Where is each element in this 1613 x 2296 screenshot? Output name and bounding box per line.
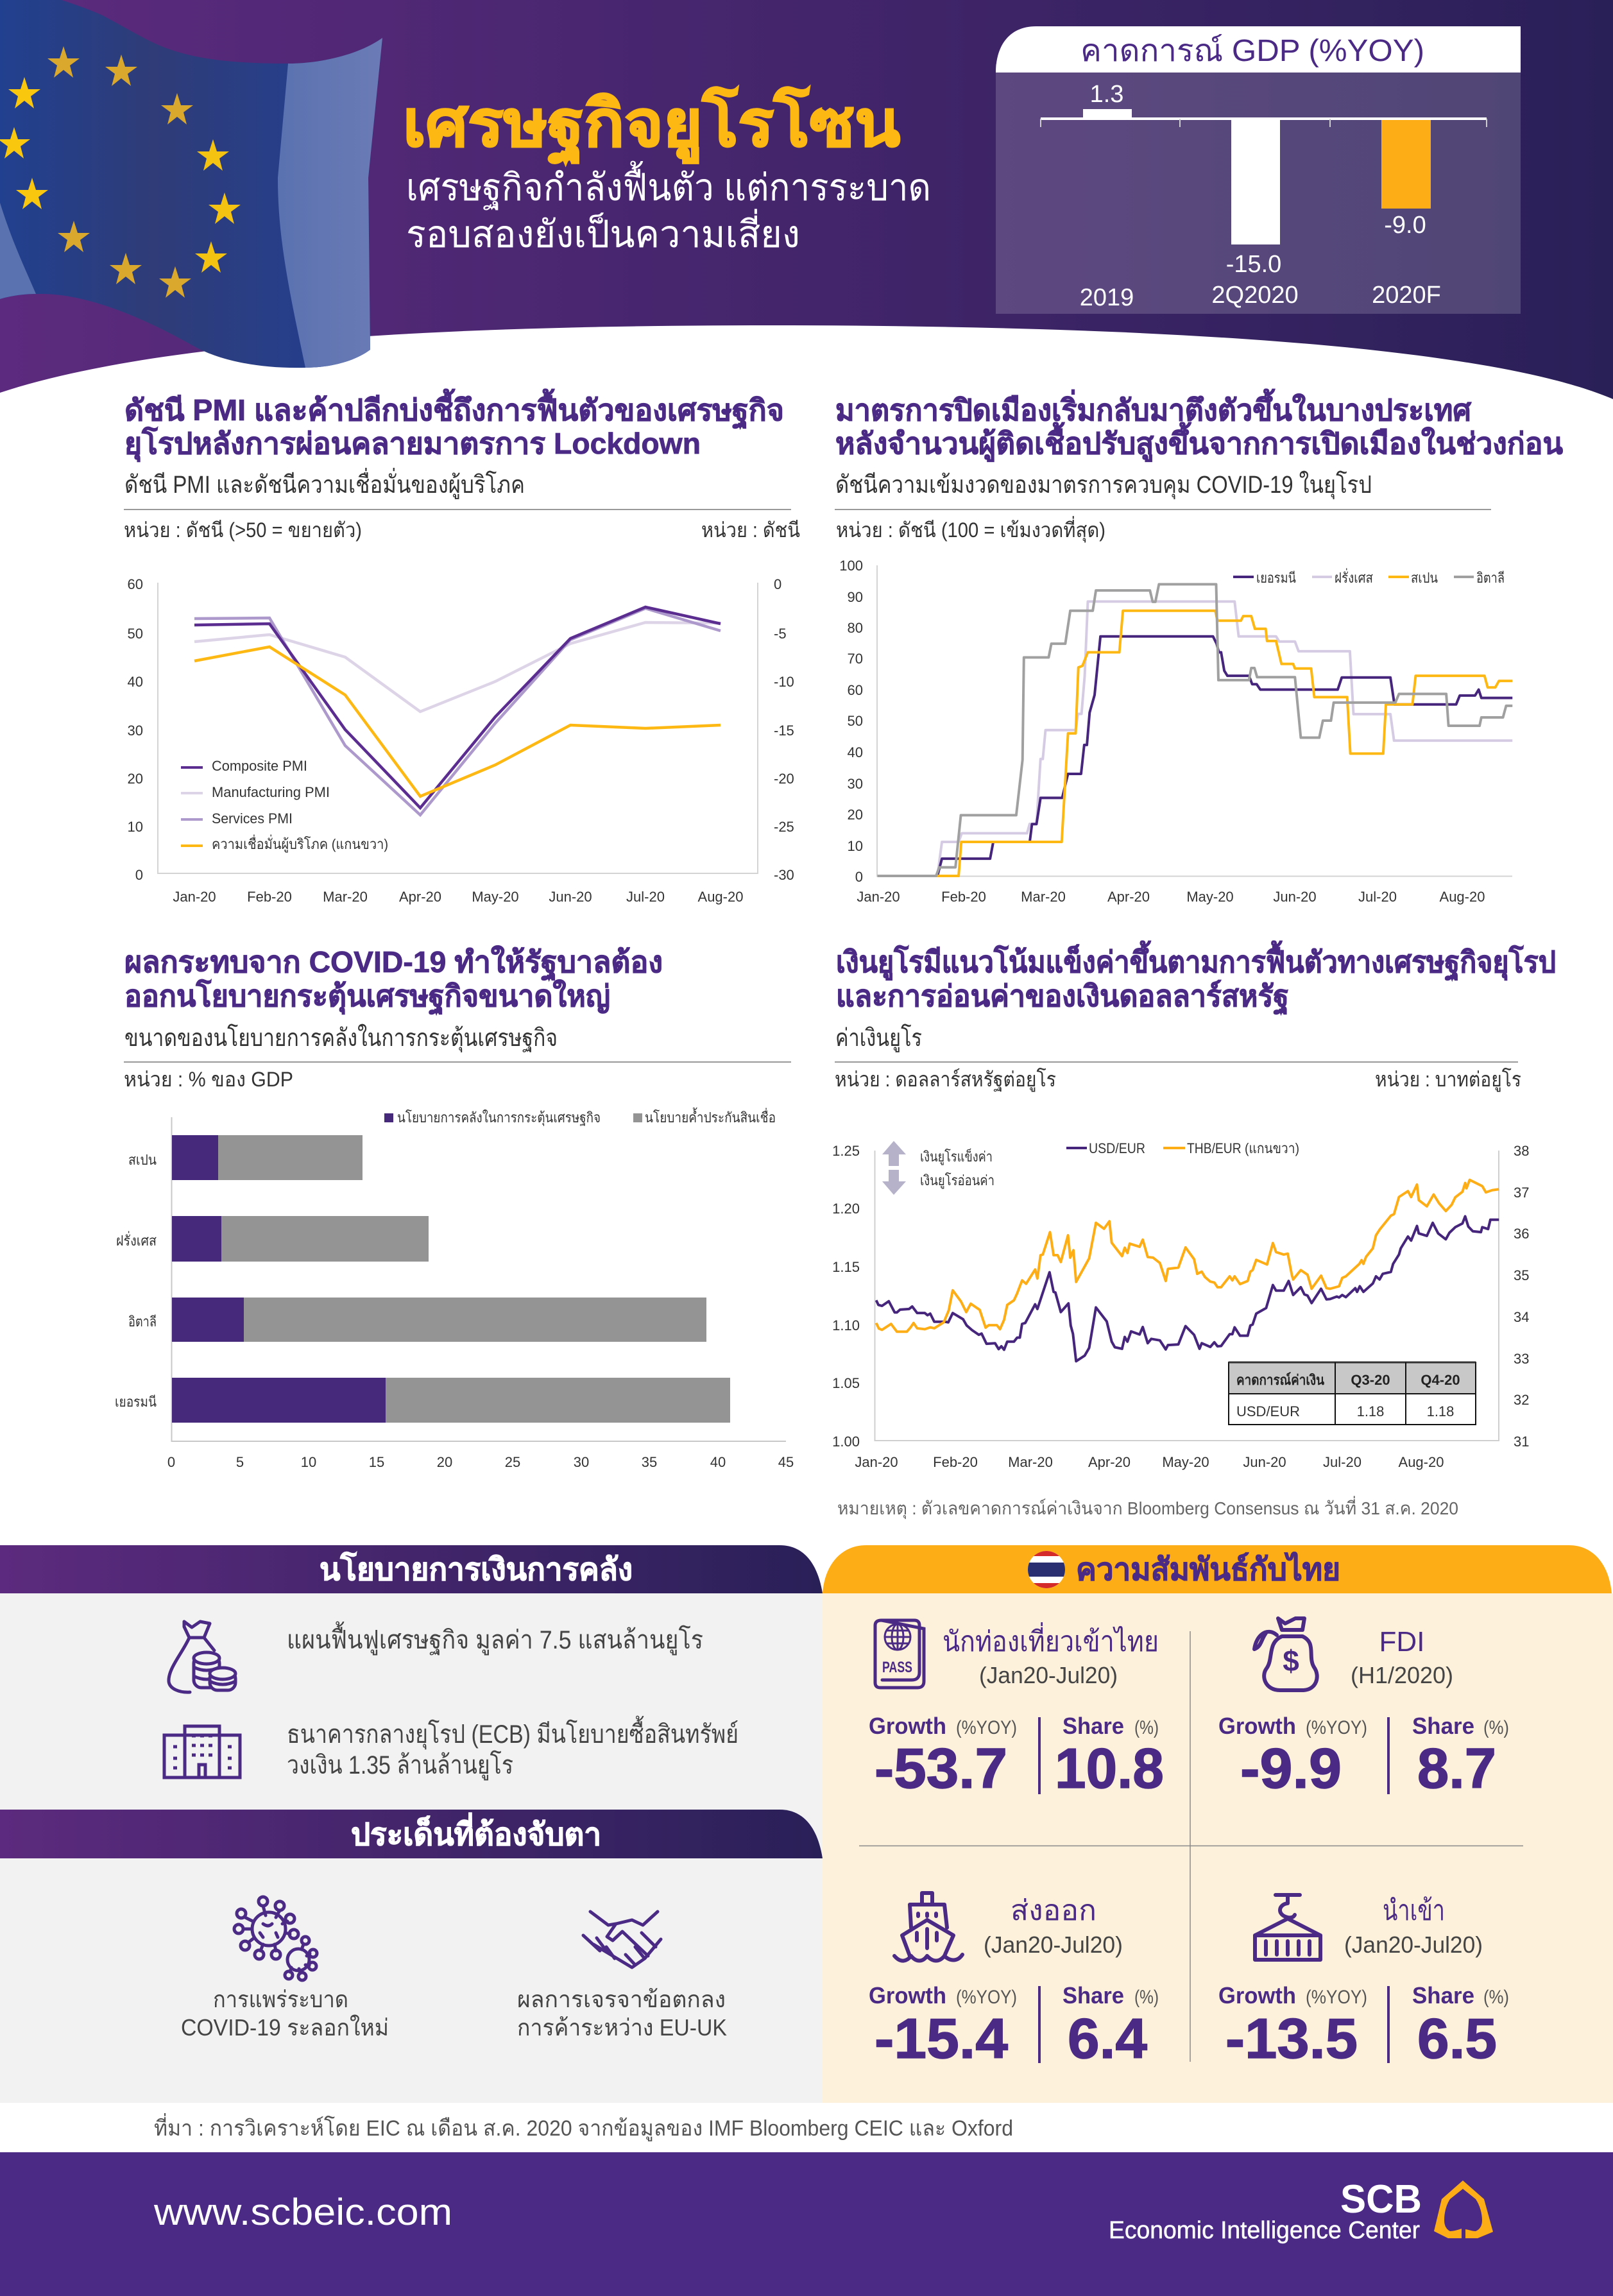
line chart: PMI [128, 576, 794, 905]
imports metric [1218, 1895, 1509, 2070]
tourism metric [869, 1620, 1164, 1800]
line chart: PMI: 60 [128, 576, 143, 592]
line chart: exchange rate: 31 [1514, 1434, 1529, 1450]
exports metric: (Jan20-Jul20) [984, 1932, 1123, 1958]
tourism metric: นักท่องเที่ยวเข้าไทย [943, 1622, 1159, 1658]
exports metric: Share [1063, 1982, 1124, 2009]
heading: PMI: ดัชนี PMI และค้าปลีกบ่งชี้ถึงการฟื้นตัวของเศรษฐกิจ [124, 388, 784, 429]
line chart: PMI: May-20 [472, 889, 519, 905]
text: trade talks: ผลการเจรจาข้อตกลง [517, 1986, 726, 2012]
line chart: stringency index: Mar-20 [1021, 889, 1066, 905]
bar chart: stimulus size: 25 [505, 1454, 520, 1470]
line chart: exchange rate: Feb-20 [933, 1454, 978, 1470]
line chart: stringency index: Aug-20 [1440, 889, 1485, 905]
text: second wave: การแพร่ระบาด [213, 1986, 348, 2012]
line chart: PMI: -10 [774, 674, 794, 690]
header background [0, 0, 1613, 424]
bar chart: stimulus size: 35 [642, 1454, 657, 1470]
line chart: stringency index: 50 [848, 713, 863, 729]
bar chart: stimulus size: 15 [369, 1454, 384, 1470]
heading: stringency: หลังจำนวนผู้ติดเชื้อปรับสูงขึ้นจากการเปิดเมืองในช่วงก่อน [835, 422, 1564, 462]
GDP bar chart: 2020F [1372, 282, 1441, 309]
line chart: PMI: 10 [128, 819, 143, 835]
exports metric: (%YOY) [956, 1987, 1017, 2008]
GDP heading: คาดการณ์ GDP (%YOY) [1080, 34, 1424, 68]
table: currency forecast: USD/EUR [1236, 1403, 1300, 1419]
GDP bar chart: 2019 [1080, 284, 1134, 311]
imports metric: (%YOY) [1306, 1987, 1367, 2008]
line chart: stringency index: 30 [848, 776, 863, 792]
imports metric: Share [1412, 1982, 1474, 2009]
line chart: exchange rate: 1.25 [832, 1143, 860, 1159]
heading: PMI: หน่วย : ดัชนี [701, 518, 800, 542]
note: currency: หมายเหตุ : ตัวเลขคาดการณ์ค่าเงินจาก Bloomberg Consensus ณ วันที่ 31 ส.ค. 2020 [837, 1496, 1458, 1520]
GDP bar chart: 1.3 [1090, 81, 1123, 108]
imports metric: (%) [1483, 1987, 1509, 2008]
heading: stimulus: ผลกระทบจาก COVID-19 ทำให้รัฐบาลต้อง [124, 945, 663, 981]
line chart: stringency index: 100 [839, 558, 863, 574]
source note: ที่มา : การวิเคราะห์โดย EIC ณ เดือน ส.ค. 2020 จากข้อมูลของ IMF Bloomberg CEIC และ Oxford [154, 2113, 1013, 2141]
heading: euro: หน่วย : ดอลลาร์สหรัฐต่อยูโร [835, 1068, 1056, 1092]
bar chart: stimulus size: 30 [574, 1454, 589, 1470]
line chart: stringency index: Apr-20 [1107, 889, 1150, 905]
line chart: exchange rate: 1.05 [832, 1375, 860, 1391]
FDI metric: Growth [1218, 1713, 1296, 1739]
line chart: stringency index: May-20 [1186, 889, 1234, 905]
GDP bar chart: -15.0 [1226, 251, 1281, 278]
PMI legend: Composite PMI [212, 758, 307, 774]
Thai heading bar [823, 1545, 1612, 1593]
line chart: exchange rate: 33 [1514, 1351, 1529, 1367]
icon: euro direction arrows [882, 1141, 994, 1195]
exports metric: -15.4 [875, 2007, 1008, 2070]
icon: passport: PASS [882, 1659, 912, 1676]
heading: euro [835, 940, 1556, 1092]
PMI legend: Manufacturing PMI [212, 784, 330, 800]
bar chart: stimulus size: 20 [437, 1454, 452, 1470]
bar chart: stimulus size [115, 1108, 794, 1470]
text: trade talks: การค้าระหว่าง EU-UK [517, 2014, 727, 2041]
heading: stimulus: ขนาดของนโยบายการคลังในการกระตุ้นเศรษฐกิจ [124, 1024, 558, 1052]
exports metric: (%) [1134, 1987, 1159, 2008]
line chart: PMI: Apr-20 [399, 889, 441, 905]
fiscal heading bar: นโยบายการเงินการคลัง [320, 1551, 633, 1587]
stringency legend: ฝรั่งเศส [1335, 568, 1373, 586]
line chart: PMI: 0 [774, 576, 781, 592]
tourism metric: (Jan20-Jul20) [979, 1662, 1118, 1688]
line chart: exchange rate: 1.10 [832, 1317, 860, 1333]
line chart: PMI: -15 [774, 723, 794, 739]
icon: virus [234, 1897, 317, 1980]
exchange rate legend: THB/EUR (แกนขวา) [1187, 1140, 1299, 1156]
line chart: stringency index: 40 [848, 744, 863, 760]
panel: Thai relations [823, 1545, 1613, 2103]
icon: ship [894, 1893, 962, 1961]
icon: money bag [1254, 1618, 1317, 1690]
tourism metric: Growth [869, 1713, 946, 1739]
imports metric: 6.5 [1417, 2007, 1497, 2070]
footer [0, 2152, 1613, 2296]
line chart: PMI: Jan-20 [173, 889, 216, 905]
subtitle: เศรษฐกิจกำลังฟื้นตัว แต่การระบาด [406, 161, 931, 210]
line chart: stringency index: 60 [848, 682, 863, 698]
heading: stimulus [124, 945, 791, 1091]
SCB wordmark [1109, 2177, 1422, 2244]
line chart: stringency index: 90 [848, 589, 863, 605]
icon: handshake [583, 1912, 661, 1967]
icon: cargo container [1255, 1895, 1320, 1960]
SCB wordmark: Economic Intelligence Center [1109, 2217, 1420, 2244]
stringency legend: อิตาลี [1476, 570, 1505, 586]
line chart: PMI: 50 [128, 626, 143, 642]
stringency legend [1233, 568, 1505, 586]
table: currency forecast [1229, 1362, 1476, 1425]
line chart: PMI: 20 [128, 771, 143, 787]
line chart: stringency index: Jan-20 [857, 889, 900, 905]
line chart: exchange rate: Jul-20 [1323, 1454, 1361, 1470]
icon: Thai flag [1027, 1550, 1066, 1589]
heading: euro: ค่าเงินยูโร [835, 1024, 922, 1052]
icon: SCB logo [1434, 2180, 1493, 2238]
SCB wordmark: SCB [1340, 2177, 1422, 2222]
FDI metric: (H1/2020) [1351, 1662, 1453, 1688]
heading: PMI [124, 388, 800, 542]
line chart: exchange rate: 36 [1514, 1226, 1529, 1242]
text: ECB [287, 1715, 738, 1780]
table: currency forecast: Q3-20 [1351, 1372, 1390, 1388]
line chart: stringency index: 10 [848, 838, 863, 854]
watch heading bar: ประเด็นที่ต้องจับตา [351, 1812, 601, 1852]
FDI metric: 8.7 [1417, 1736, 1496, 1800]
icon: euro direction arrows: เงินยูโรแข็งค่า [920, 1147, 993, 1165]
tourism metric: Share [1063, 1713, 1124, 1739]
FDI metric: (%YOY) [1306, 1717, 1367, 1738]
panel: GDP forecast [996, 26, 1521, 314]
line chart: exchange rate: 1.20 [832, 1201, 860, 1217]
heading: stimulus: ออกนโยบายกระตุ้นเศรษฐกิจขนาดใหญ่ [124, 979, 610, 1015]
heading: stimulus: หน่วย : % ของ GDP [124, 1068, 293, 1091]
line chart: PMI: -30 [774, 867, 794, 883]
icon: EU flag [0, 0, 382, 368]
table: currency forecast: คาดการณ์ค่าเงิน [1236, 1372, 1324, 1388]
text: ECB: ธนาคารกลางยุโรป (ECB) มีนโยบายซื้อสินทรัพย์ [287, 1715, 738, 1750]
line chart: PMI: Feb-20 [247, 889, 292, 905]
PMI legend: Services PMI [212, 810, 293, 827]
line chart: PMI: Mar-20 [323, 889, 368, 905]
FDI metric: -9.9 [1240, 1736, 1342, 1800]
line chart: exchange rate: 34 [1514, 1309, 1529, 1325]
imports metric: -13.5 [1225, 2007, 1358, 2070]
heading: PMI: หน่วย : ดัชนี (>50 = ขยายตัว) [124, 518, 362, 542]
heading: stringency: หน่วย : ดัชนี (100 = เข้มงวดที่สุด) [836, 516, 1105, 543]
watch heading bar [0, 1810, 823, 1858]
FDI metric: FDI [1379, 1626, 1424, 1658]
website: www.scbeic.com [153, 2191, 452, 2233]
icon: money bag with coins [169, 1622, 235, 1692]
line chart: stringency index [839, 558, 1512, 905]
GDP bar chart: -9.0 [1384, 212, 1426, 239]
line chart: stringency index: Jul-20 [1358, 889, 1397, 905]
bar chart: stimulus size: 0 [167, 1454, 175, 1470]
line chart: exchange rate: 38 [1514, 1143, 1529, 1159]
GDP bar chart: 2Q2020 [1211, 282, 1299, 309]
line chart: stringency index: 80 [848, 620, 863, 636]
tourism metric: -53.7 [875, 1736, 1007, 1800]
line chart: exchange rate: 1.15 [832, 1259, 860, 1275]
fiscal heading bar [0, 1545, 823, 1593]
line chart: PMI: 0 [135, 867, 143, 883]
line chart: PMI: Jun-20 [549, 889, 592, 905]
line chart: exchange rate: May-20 [1162, 1454, 1209, 1470]
imports metric: นำเข้า [1383, 1895, 1445, 1926]
line chart: PMI: 40 [128, 674, 143, 690]
imports metric: Growth [1218, 1982, 1296, 2009]
FDI metric: Share [1412, 1713, 1474, 1739]
bar chart: stimulus size: 45 [778, 1454, 794, 1470]
PMI legend [181, 758, 388, 853]
line chart: exchange rate: Jan-20 [855, 1454, 898, 1470]
line chart: exchange rate: 35 [1514, 1267, 1529, 1283]
bar chart: stimulus size: ฝรั่งเศส [116, 1231, 157, 1249]
line chart: exchange rate: 32 [1514, 1392, 1529, 1408]
line chart: exchange rate: Apr-20 [1088, 1454, 1131, 1470]
bar chart: stimulus size: 10 [301, 1454, 316, 1470]
heading: euro: หน่วย : บาทต่อยูโร [1375, 1068, 1521, 1092]
text: second wave [181, 1986, 389, 2041]
white content area [0, 325, 1613, 2156]
line chart: PMI: -5 [774, 626, 787, 642]
line chart: stringency index: 20 [848, 807, 863, 823]
subtitle: รอบสองยังเป็นความเสี่ยง [406, 209, 800, 255]
stringency legend: สเปน [1411, 570, 1438, 586]
table: currency forecast: 1.18 [1427, 1403, 1454, 1419]
line chart: exchange rate: 37 [1514, 1185, 1529, 1201]
bar chart: stimulus size: เยอรมนี [115, 1394, 157, 1410]
line chart: stringency index: 70 [848, 651, 863, 667]
stimulus legend: นโยบายการคลังในการกระตุ้นเศรษฐกิจ [397, 1109, 601, 1126]
imports metric: (Jan20-Jul20) [1344, 1932, 1483, 1958]
bar chart: stimulus size: 40 [710, 1454, 726, 1470]
line chart: exchange rate: Jun-20 [1243, 1454, 1286, 1470]
exports metric: ส่งออก [1011, 1895, 1097, 1926]
line chart: PMI: -20 [774, 771, 794, 787]
exchange rate legend: USD/EUR [1089, 1140, 1145, 1156]
heading: stringency: ดัชนีความเข้มงวดของมาตรการควบคุม COVID-19 ในยุโรป [835, 470, 1372, 499]
heading: stringency: มาตรการปิดเมืองเริ่มกลับมาตึงตัวขึ้นในบางประเทศ [835, 388, 1472, 427]
stringency legend: เยอรมนี [1256, 570, 1296, 586]
FDI metric [1218, 1618, 1509, 1800]
FDI metric: (%) [1483, 1717, 1509, 1738]
heading: PMI: ดัชนี PMI และดัชนีความเชื่อมั่นของผู้บริโภค [124, 468, 525, 499]
text: second wave: COVID-19 ระลอกใหม่ [181, 2014, 389, 2041]
icon: passport [875, 1620, 924, 1688]
tourism metric: (%YOY) [956, 1717, 1017, 1738]
GDP bar chart [1041, 81, 1487, 311]
line chart: stringency index: 0 [855, 869, 863, 885]
line chart: stringency index: Feb-20 [941, 889, 986, 905]
table: currency forecast: Q4-20 [1421, 1372, 1460, 1388]
bar chart: stimulus size: อิตาลี [128, 1314, 157, 1330]
line chart: PMI: 30 [128, 723, 143, 739]
bar chart: stimulus size: 5 [236, 1454, 244, 1470]
title: เศรษฐกิจยูโรโซน [403, 86, 900, 166]
Thai heading bar: ความสัมพันธ์กับไทย [1076, 1551, 1340, 1587]
panel: left bottom [0, 1545, 823, 2103]
icon: money bag: $ [1283, 1644, 1299, 1677]
tourism metric: (%) [1134, 1717, 1159, 1738]
PMI legend: ความเชื่อมั่นผู้บริโภค (แกนขวา) [212, 834, 388, 853]
icon: euro direction arrows: เงินยูโรอ่อนค่า [920, 1172, 994, 1189]
bar chart: stimulus size: สเปน [128, 1152, 157, 1168]
line chart: exchange rate: Aug-20 [1399, 1454, 1444, 1470]
tourism metric: 10.8 [1055, 1736, 1164, 1800]
exchange rate legend [1066, 1140, 1299, 1156]
text: trade talks [517, 1986, 727, 2041]
line chart: PMI: -25 [774, 819, 794, 835]
icon: building [164, 1726, 240, 1778]
stimulus legend: นโยบายค้ำประกันสินเชื่อ [645, 1108, 776, 1126]
heading: PMI: ยุโรปหลังการผ่อนคลายมาตรการ Lockdown [124, 426, 701, 462]
heading: euro: และการอ่อนค่าของเงินดอลลาร์สหรัฐ [836, 979, 1289, 1015]
subtitle [406, 161, 931, 255]
exports metric: Growth [869, 1982, 946, 2009]
line chart: exchange rate: 1.00 [832, 1434, 860, 1450]
text: recovery plan: แผนฟื้นฟูเศรษฐกิจ มูลค่า 7.5 แสนล้านยูโร [287, 1621, 703, 1656]
text: ECB: วงเงิน 1.35 ล้านล้านยูโร [287, 1751, 513, 1780]
table: currency forecast: 1.18 [1357, 1403, 1384, 1419]
exports metric: 6.4 [1068, 2007, 1147, 2070]
stimulus legend [384, 1108, 776, 1126]
line chart: PMI: Jul-20 [626, 889, 665, 905]
line chart: stringency index: Jun-20 [1273, 889, 1317, 905]
line chart: PMI: Aug-20 [698, 889, 743, 905]
heading: euro: เงินยูโรมีแนวโน้มแข็งค่าขึ้นตามการฟื้นตัวทางเศรษฐกิจยุโรป [836, 940, 1556, 981]
heading: stringency [835, 388, 1564, 543]
line chart: exchange rate: Mar-20 [1008, 1454, 1053, 1470]
line chart: exchange rate [832, 1140, 1529, 1470]
exports metric [869, 1893, 1159, 2070]
